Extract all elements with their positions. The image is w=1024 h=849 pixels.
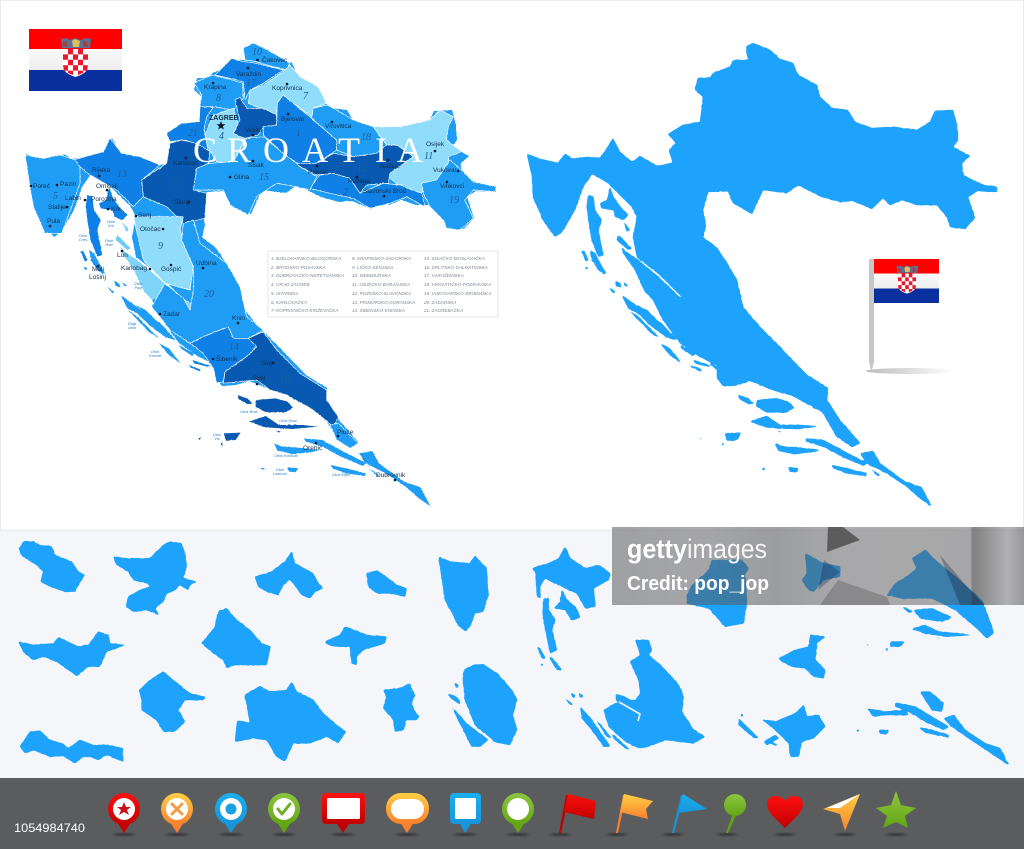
legend column 3: 21. ZAGREBAČKA — [423, 307, 463, 313]
legend column 2: 8. KRAPINSKO-ZAGORSKA — [352, 256, 411, 261]
city labels: Krapina — [204, 84, 227, 91]
city labels: Poreč — [33, 183, 51, 190]
city labels: Slunj — [174, 199, 188, 206]
region numbers: 11 — [424, 151, 433, 162]
city labels: Gospić — [161, 266, 182, 273]
watermark facets — [818, 527, 985, 605]
right map: solid silhouette of Croatia — [527, 43, 997, 507]
icon shadows — [113, 833, 906, 836]
panel: regional shapes background — [0, 529, 1024, 779]
legend column 3: 18. VIROVITIČKO-PODRAVSKA — [424, 281, 491, 287]
region numbers: 5 — [53, 191, 58, 202]
city labels: Stalije — [48, 204, 66, 211]
bottom panel: individual region silhouettes — [18, 542, 1009, 765]
region numbers: 12 — [357, 163, 367, 174]
page edge frame — [0, 0, 1024, 530]
pin shadow — [866, 368, 954, 374]
city labels — [33, 55, 464, 479]
credit line: Credit: pop_jop — [627, 573, 769, 595]
region numbers: 16 — [280, 374, 290, 385]
city labels: Požega — [348, 178, 370, 185]
getty images logo: getty — [627, 534, 687, 564]
icon: red heart — [767, 796, 803, 828]
left map: regions of Croatia — [25, 43, 498, 507]
icon: red star pin — [108, 793, 140, 833]
city labels: Koprivnica — [272, 85, 303, 92]
city labels: Sisak — [248, 162, 265, 169]
legend column 3: 19. VUKOVARSKO-SRIJEMSKA — [424, 291, 491, 296]
city labels: Bjelovar — [281, 116, 305, 123]
city labels: Lošinj — [89, 274, 106, 281]
legend column 1 — [270, 256, 344, 313]
legend column 1: 4. GRAD ZAGREB — [271, 282, 310, 287]
icon: blue square pin — [450, 793, 481, 833]
bottom toolbar — [0, 778, 1024, 849]
legend column 1: 1. BJELOVARSKO-BILOGORSKA — [271, 256, 341, 261]
legend column 1: 7. KOPRIVNIČKO-KRIŽEVAČKA — [271, 306, 338, 313]
city labels: Orebić — [303, 445, 323, 452]
island labels: Otok — [151, 349, 160, 354]
city labels: Omišalj — [96, 183, 118, 190]
island labels: Cres — [79, 237, 87, 242]
city labels: Knin — [232, 315, 245, 322]
region numbers: 6 — [173, 178, 178, 189]
island labels: Otok Mljet — [332, 472, 351, 477]
icon: blue ring pin — [215, 793, 247, 833]
city labels: Varaždin — [236, 71, 262, 78]
right-hand shapes — [532, 547, 1009, 765]
legend column 2: 11. OSJEČKO-BARANJSKA — [352, 281, 410, 287]
icon: blue flag — [672, 794, 707, 833]
city labels: Karlobag — [121, 265, 147, 272]
flag of Croatia — [29, 29, 122, 91]
city labels: Velika — [245, 127, 263, 134]
island labels: Kornat — [149, 353, 162, 358]
region numbers: 2 — [343, 187, 348, 198]
region numbers: 1 — [296, 128, 301, 139]
region numbers — [53, 47, 459, 464]
island labels: Otok — [79, 233, 88, 238]
capital star — [216, 121, 226, 130]
legend column 3 — [423, 255, 491, 313]
region numbers: 18 — [361, 132, 371, 143]
icon: green ball pin — [724, 794, 746, 833]
city labels: Šibenik — [216, 354, 238, 363]
icon: green check pin — [268, 793, 300, 833]
legend column 3: 15. SISAČKO-MOSLAVAČKA — [424, 255, 485, 261]
city labels: Pazin — [60, 181, 77, 188]
icon: green star — [876, 791, 916, 828]
city labels: Krk — [111, 206, 122, 213]
legend column 2: 10. MEĐIMURSKA — [352, 273, 391, 278]
city labels: Čakovec — [262, 55, 288, 64]
island labels: Otok Brač — [240, 409, 258, 414]
city labels: Udbina — [196, 260, 217, 267]
legend column 1: 6. KARLOVAČKA — [271, 299, 307, 305]
island labels: Otok — [134, 281, 143, 286]
icon: navigation arrow — [823, 794, 860, 831]
legend column 1: 5. ISTARSKA — [271, 291, 298, 296]
island labels: Rab — [105, 242, 113, 247]
city markers — [30, 59, 459, 481]
city labels: Našice — [380, 163, 400, 170]
legend column 2: 12. POŽEŠKO-SLAVONSKA — [352, 289, 411, 296]
legend column 2: 9. LIČKO-SENJSKA — [352, 264, 393, 270]
country name: CROATIA — [193, 130, 423, 170]
city labels: Mali — [92, 266, 104, 273]
watermark panel — [612, 527, 1024, 605]
city labels: Osijek — [426, 141, 445, 148]
city labels: Rijeka — [92, 167, 110, 174]
icon: red flag — [559, 794, 596, 833]
island labels: Dugi — [128, 321, 136, 326]
island labels: Otok — [213, 432, 222, 437]
city labels: Labin — [65, 195, 81, 202]
island labels: Otok — [276, 467, 285, 472]
city labels: Sinj — [261, 360, 272, 367]
stock image number: 1054984740 — [14, 823, 85, 835]
legend column 3: 17. VARAŽDINSKA — [424, 271, 464, 278]
region numbers: 13 — [117, 169, 127, 180]
pin pole — [869, 259, 874, 372]
city labels: Senj — [138, 212, 151, 219]
city labels: Otočac — [140, 226, 161, 233]
legend column 1: 3. DUBROVAČKO-NERETVANSKA — [271, 272, 344, 278]
legend column 3: 16. SPLITSKO-DALMATINSKA — [424, 265, 488, 270]
region numbers: 14 — [229, 342, 239, 353]
region numbers: 8 — [216, 93, 221, 104]
legend box — [268, 251, 498, 317]
watermark gray veil — [612, 527, 1024, 605]
icon: orange flag — [616, 794, 653, 833]
region numbers: 21 — [188, 128, 198, 139]
region numbers: 17 — [246, 78, 257, 89]
region numbers: 7 — [303, 91, 309, 102]
sea inlet near Zadar on the shape — [619, 702, 640, 721]
icon: red rectangle pin — [322, 793, 365, 833]
island labels: Otok — [107, 219, 116, 224]
city labels: Dubrovnik — [376, 472, 406, 479]
city labels: Porozina — [91, 196, 117, 203]
island labels: Otok — [105, 238, 114, 243]
legend column 2: 14. ŠIBENSKO-KNINSKA — [352, 307, 405, 313]
regional fill shapes — [25, 43, 497, 507]
getty images logo — [627, 534, 767, 564]
city labels: Karlovac — [173, 160, 199, 167]
city labels: Lun — [117, 252, 128, 259]
legend column 1: 2. BRODSKO-POSAVSKA — [270, 265, 325, 270]
island labels: Otok Hvar — [279, 418, 298, 423]
getty images logo: images — [687, 534, 767, 564]
icon: orange rounded pin — [386, 793, 429, 833]
region numbers: 10 — [252, 47, 262, 58]
icon: orange cross pin — [161, 793, 193, 833]
left-hand shapes — [18, 542, 517, 763]
city labels: Pula — [47, 218, 60, 225]
city labels: Glina — [234, 174, 250, 181]
island labels: Vis — [214, 436, 220, 441]
island labels: Pag — [134, 285, 142, 290]
island labels: Otok — [128, 325, 137, 330]
legend column 2 — [352, 256, 415, 313]
island labels — [79, 219, 351, 477]
region numbers: 19 — [449, 195, 459, 206]
icon: green circle pin — [502, 793, 534, 833]
city labels: Zadar — [163, 311, 181, 318]
region numbers: 4 — [219, 131, 224, 142]
region numbers: 3 — [361, 458, 365, 464]
city labels: Vinkovci — [440, 183, 464, 190]
city labels: Split — [253, 375, 266, 382]
city labels: Virovitica — [325, 123, 352, 130]
island labels: Otok Korčula — [274, 453, 298, 458]
legend column 3: 20. ZADARSKA — [423, 300, 456, 305]
city labels: Slavonski Brod — [363, 188, 407, 195]
legend column 2: 13. PRIMORSKO-GORANSKA — [352, 300, 415, 305]
island labels: Lastovo — [273, 471, 288, 476]
region numbers: 20 — [204, 289, 214, 300]
watermark backdrop — [612, 527, 1024, 605]
flag pin — [866, 259, 954, 374]
city labels: Ploče — [337, 429, 354, 436]
island labels: Krk — [108, 223, 115, 228]
pin flag — [874, 259, 939, 303]
city labels: Vukovar — [433, 167, 457, 174]
city labels: Pakrac — [308, 169, 329, 176]
capital label: ZAGREB — [209, 115, 239, 122]
region numbers: 15 — [259, 172, 269, 183]
region numbers: 9 — [158, 241, 163, 252]
